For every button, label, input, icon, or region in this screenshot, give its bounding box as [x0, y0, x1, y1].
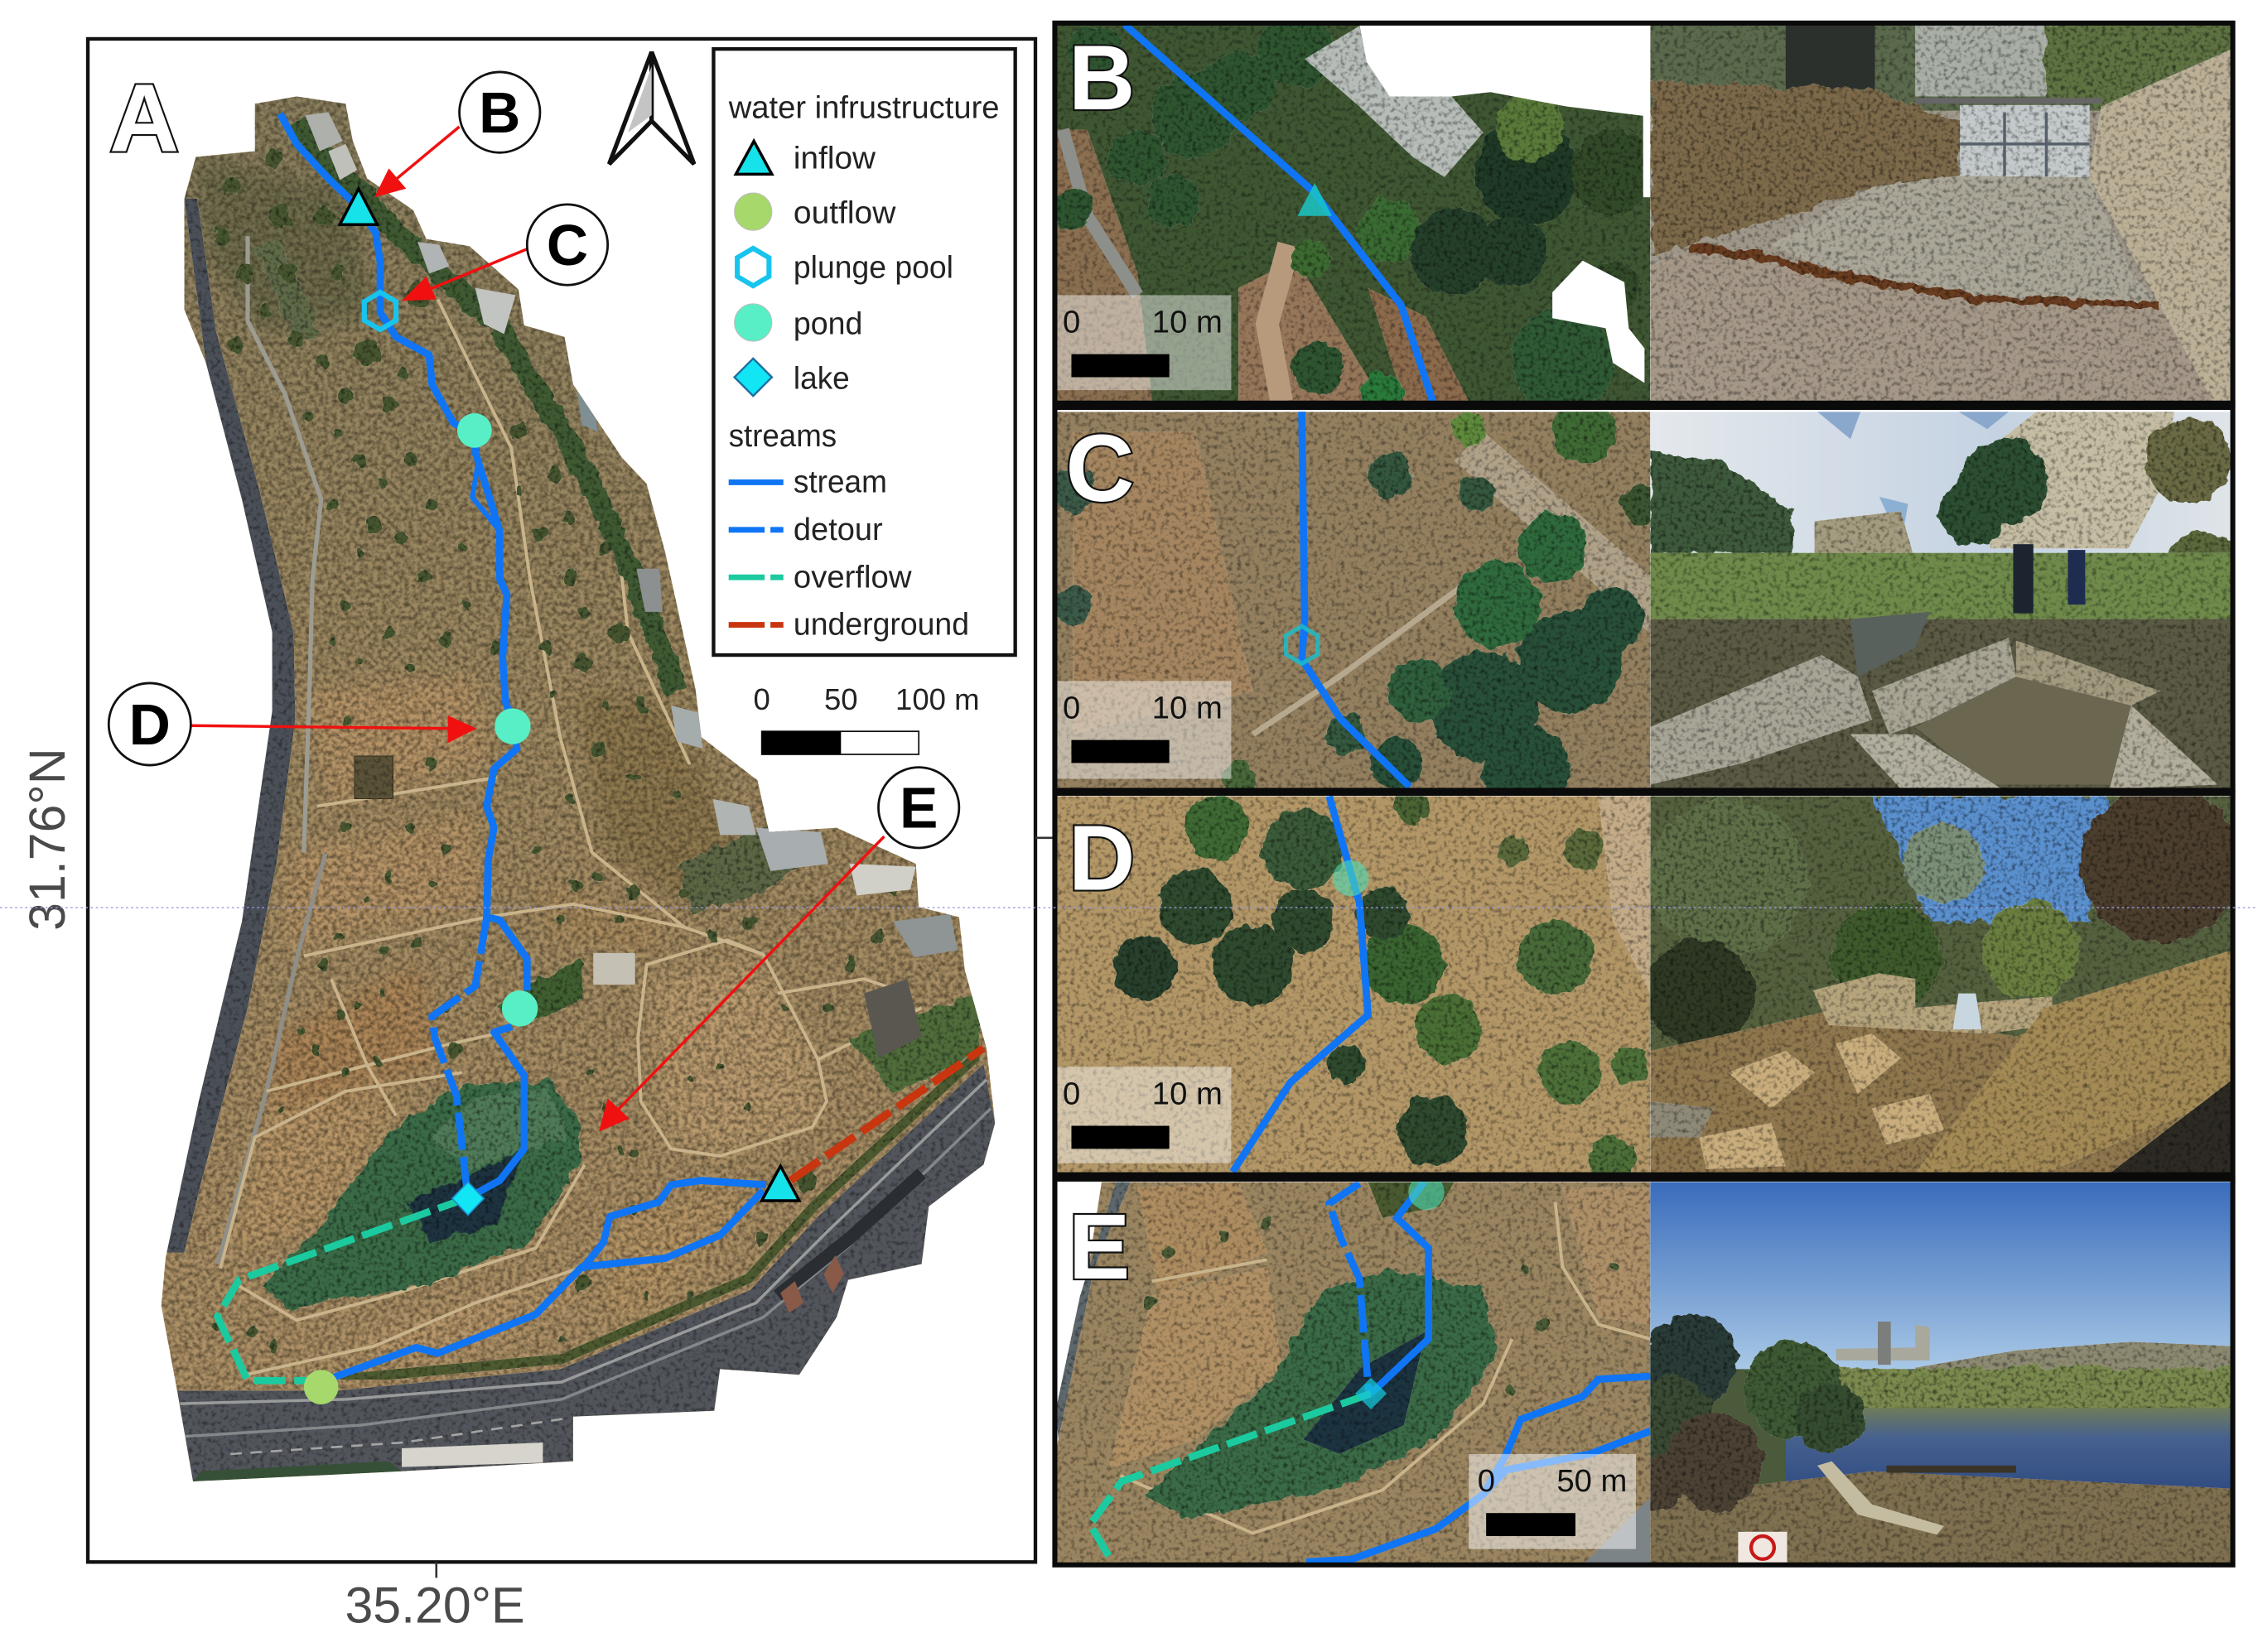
- scale B: 0: [1063, 305, 1080, 340]
- streams E: [1090, 1182, 1650, 1563]
- scale E: [1469, 1454, 1636, 1549]
- pond marker E: [1408, 1174, 1445, 1210]
- inflow south: [762, 1166, 799, 1201]
- scale B: [1055, 295, 1231, 390]
- map scale bar: 50: [824, 682, 858, 716]
- legend: underground: [794, 607, 969, 643]
- callout D: D: [129, 692, 171, 757]
- plunge pool: [364, 292, 396, 330]
- legend: lake: [794, 360, 850, 396]
- photo B: inflow structure: [1650, 25, 2232, 402]
- panel E: [1055, 1174, 2232, 1563]
- footpaths: [218, 236, 922, 1375]
- legend: detour: [794, 512, 883, 547]
- stream B: [1125, 25, 1433, 402]
- callout D: [109, 683, 191, 765]
- panel letter D: D: [1069, 806, 1135, 909]
- panel D: [1055, 785, 2239, 1182]
- panel A: site map: [88, 39, 1035, 1562]
- aerial view E: [1055, 1182, 1650, 1563]
- scale E: 50 m: [1556, 1463, 1627, 1499]
- legend: pond: [794, 306, 862, 341]
- scale C: [1055, 681, 1231, 779]
- lake marker E: [1355, 1378, 1387, 1409]
- aerial view D: [1055, 789, 1650, 1182]
- overflow: [218, 1197, 468, 1380]
- callout C: C: [547, 213, 588, 277]
- longitude tick and label: 35.20°E: [345, 1577, 525, 1633]
- stream network: [218, 113, 983, 1380]
- callout arrow C: [402, 249, 527, 301]
- roads: [166, 199, 995, 1481]
- legend: water infrustructure: [728, 90, 1000, 126]
- legend: [713, 49, 1016, 655]
- lake: [452, 1182, 484, 1215]
- underground: [790, 1048, 983, 1181]
- legend: inflow: [794, 140, 876, 176]
- callout B: B: [479, 80, 520, 145]
- legend: outflow: [794, 195, 896, 230]
- orthophoto of the park: [144, 86, 1008, 1497]
- panel frames: [1054, 23, 2233, 1565]
- inflow north: [340, 189, 377, 224]
- pond 3: [502, 990, 538, 1027]
- scale B: 10 m: [1152, 305, 1223, 340]
- callout arrow D: [189, 715, 476, 743]
- stream C: [1302, 412, 1410, 787]
- panel letter B: B: [1069, 26, 1135, 129]
- scale C: 10 m: [1152, 691, 1223, 726]
- vegetation band and lake: [263, 123, 979, 1308]
- stream D: [1233, 796, 1368, 1172]
- pond 1: [457, 413, 492, 448]
- detour: [432, 917, 487, 1197]
- buildings along the edge: [306, 113, 958, 1058]
- pond marker D: [1333, 860, 1368, 896]
- north arrow: [609, 52, 694, 164]
- legend: overflow: [794, 559, 912, 595]
- trees: [212, 148, 897, 1371]
- photo E: lake: [1628, 1182, 2232, 1563]
- callout E: [878, 768, 959, 848]
- scale D: 10 m: [1152, 1076, 1223, 1111]
- dotted latitude graticule: [0, 907, 2258, 908]
- pond 2: [495, 708, 531, 744]
- panel letter C: C: [1066, 416, 1134, 522]
- aerial view C: [1049, 400, 1662, 813]
- legend: plunge pool: [794, 250, 953, 286]
- scale D: [1055, 1067, 1231, 1163]
- outflow: [304, 1370, 339, 1404]
- map symbols: [304, 189, 799, 1404]
- aerial view B: [1053, 13, 1656, 412]
- latitude tick and label: 31.76°N: [19, 748, 75, 931]
- callout E: E: [900, 776, 938, 840]
- inflow marker B: [1297, 183, 1332, 216]
- streams: upper course: [280, 113, 766, 1377]
- callout arrow E: [599, 836, 884, 1132]
- scale C: 0: [1063, 691, 1080, 726]
- legend: stream: [794, 465, 887, 500]
- panel B: [1053, 13, 2232, 412]
- scale E: 0: [1478, 1463, 1495, 1499]
- photo C: plunge pool: [1650, 412, 2246, 789]
- callout arrow B: [374, 127, 460, 197]
- callout C: [527, 205, 608, 285]
- scale D: 0: [1063, 1076, 1080, 1111]
- map scale bar: [754, 682, 980, 754]
- map scale bar: 0: [754, 682, 770, 716]
- legend: streams: [729, 418, 837, 454]
- photo D: weir and rocks: [1644, 785, 2239, 1173]
- panel letter E: E: [1069, 1195, 1130, 1298]
- plunge pool marker C: [1286, 626, 1318, 663]
- panel letter A: A: [109, 65, 179, 172]
- panel C: [1049, 400, 2246, 813]
- callout B: [460, 72, 540, 152]
- map scale bar: 100 m: [895, 682, 980, 716]
